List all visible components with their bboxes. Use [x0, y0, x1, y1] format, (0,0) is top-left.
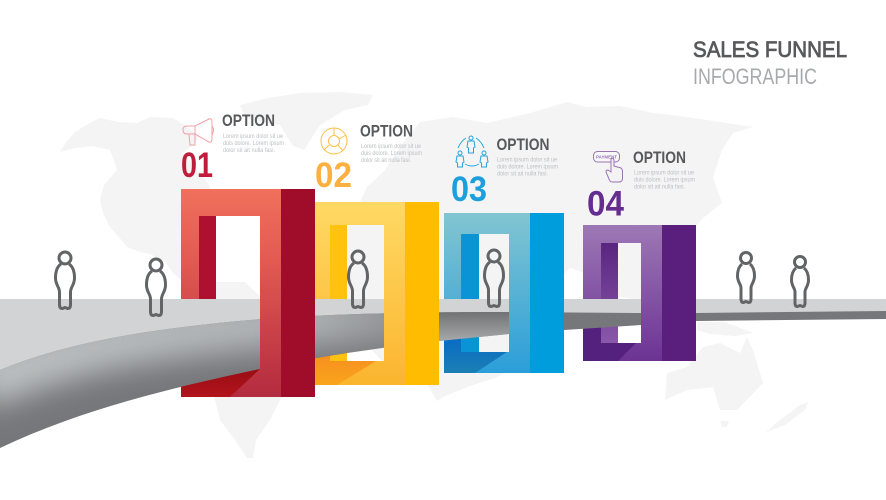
option 02 text: Lorem ipsum dolor sit ue — [361, 143, 421, 150]
panel: frame 03 — [444, 213, 530, 373]
person 1 — [56, 252, 74, 308]
option 02 text — [360, 122, 422, 164]
panel: frame 04 — [583, 225, 662, 361]
title: INFOGRAPHIC — [693, 64, 817, 89]
option 03 text: dolor sit ait nulla fasi. — [497, 170, 548, 178]
option 01 text: OPTION — [222, 112, 275, 130]
option 01 text — [222, 112, 284, 154]
icon: payment button: PAYMENT — [596, 154, 617, 160]
number 03: 03 — [451, 170, 487, 209]
option 02 text: OPTION — [360, 122, 413, 140]
background world map — [60, 92, 808, 458]
option 02 text: duis dolore. Lorem ipsum — [361, 150, 422, 157]
person 2 — [146, 259, 166, 316]
person 6 — [792, 256, 808, 306]
panel: frame 02 — [315, 202, 405, 385]
icon: payment button — [594, 152, 622, 182]
frame 04 front pillar — [641, 225, 696, 361]
road — [0, 299, 886, 448]
option 04 text: OPTION — [633, 149, 686, 167]
person 3 — [348, 251, 368, 308]
option 04 text: Lorem ipsum dolor sit ue — [634, 170, 694, 176]
title — [693, 37, 847, 89]
frame 01 front pillar — [260, 189, 315, 397]
option 03 text: OPTION — [496, 136, 550, 154]
number 01: 01 — [181, 146, 213, 185]
icon: pie chart — [321, 128, 347, 154]
option 03 text: duis dolore. Lorem ipsum — [497, 164, 558, 170]
option 04 text: dolor sit ait nulla fasi. — [634, 184, 685, 190]
person 5 — [738, 252, 754, 302]
option 03 text: Lorem ipsum dolor sit ue — [497, 156, 557, 164]
panel: frame 01 — [181, 189, 281, 397]
option 04 text — [633, 149, 695, 190]
option 03 text — [496, 136, 558, 178]
frame 02 front pillar — [384, 202, 439, 385]
title: SALES FUNNEL — [693, 37, 847, 62]
option 04 text: duis dolore. Lorem ipsum — [634, 176, 695, 184]
icon: megaphone — [183, 119, 214, 145]
option 02 text: dolor sit ait nulla fasi. — [361, 157, 411, 164]
option 01 text: dolor sit ait nulla fasi. — [223, 147, 275, 154]
number 04: 04 — [587, 184, 625, 224]
icon: group of people — [456, 136, 488, 167]
frame 03 front pillar — [509, 213, 564, 373]
person 4 — [484, 250, 504, 306]
option 01 text: duis dolore. Lorem ipsum — [223, 140, 284, 147]
option 01 text: Lorem ipsum dolor sit ue — [223, 133, 283, 140]
number 02: 02 — [315, 156, 352, 195]
